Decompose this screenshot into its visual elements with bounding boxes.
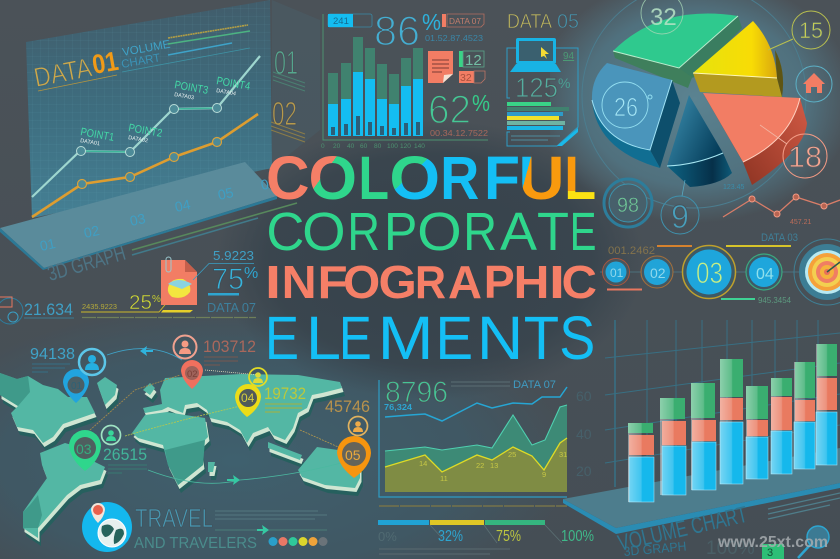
value tag 241 (328, 14, 372, 27)
bar 4 (720, 359, 743, 484)
title line: elements: E (436, 304, 473, 372)
figure: 001.2462 (608, 245, 655, 257)
heading: 05 (557, 11, 579, 33)
chart back wall (26, 0, 272, 218)
bar 1 (628, 423, 654, 502)
figure and percent 25: % (152, 294, 161, 305)
figure 8796: 8796 (385, 376, 448, 409)
percent 62: % (472, 90, 490, 116)
title line: colorful (266, 144, 596, 212)
data tag (442, 14, 484, 27)
figure and percent 25: 2435.9223 (82, 302, 117, 311)
person marker 26515: 26515 (103, 445, 147, 464)
watermark: www.25xt.com (717, 534, 828, 551)
data labels: 11 (440, 474, 448, 483)
point labels: DATA02 (128, 135, 148, 144)
bar 2 (660, 398, 686, 495)
title line: infographic: O (343, 256, 380, 308)
title line: infographic: A (448, 256, 482, 308)
fine print (379, 549, 510, 554)
axes (323, 14, 488, 140)
heading and travelers: AND TRAVELERS (134, 535, 257, 552)
person marker 94138 (30, 346, 105, 375)
slice: yellow (693, 21, 783, 97)
icon: home (796, 66, 832, 102)
title line: infographic: H (514, 256, 550, 308)
caption 3D graph: 3D GRAPH (623, 539, 687, 559)
heading data 07: DATA 07 (513, 379, 556, 391)
data labels: 31 (559, 450, 567, 459)
callout 15 (768, 11, 830, 50)
data labels (419, 450, 567, 483)
title line: corporate: O (417, 202, 462, 262)
step 04 (746, 254, 782, 290)
value tag 32: 32 (460, 72, 472, 84)
figure 100%: 100% (706, 538, 755, 559)
axis numbers: 04 (173, 196, 192, 215)
point labels: DATA03 (174, 92, 194, 101)
data labels: 14 (419, 459, 427, 468)
slice: green (613, 14, 742, 88)
title line: infographic: I (265, 256, 281, 308)
axis numbers: 0 (259, 176, 270, 193)
percent 86: % (422, 9, 441, 35)
data labels: 25 (508, 450, 516, 459)
green area (385, 405, 567, 492)
value tag 32 (459, 71, 485, 84)
callout 18 (760, 125, 827, 178)
slice: navy wedge (667, 95, 732, 187)
data labels: 22 (476, 461, 484, 470)
axis values: 60 (576, 388, 592, 404)
percent labels: 100% (561, 528, 594, 545)
icon: target (794, 239, 840, 305)
percent 75: 75 (212, 263, 244, 296)
figure 5.9223 (193, 249, 254, 280)
step 01: 01 (610, 266, 624, 280)
value tag 241: 241 (333, 16, 349, 27)
axis numbers: 01 (38, 235, 57, 254)
title line: colorful: L (358, 144, 389, 212)
chart heading: VOLUME (121, 39, 172, 59)
percent 75 (208, 263, 258, 296)
map continents top (0, 373, 360, 538)
axis values: 40 (576, 426, 592, 442)
person marker 26515 (102, 426, 147, 473)
title line: infographic: G (378, 256, 417, 308)
fine print (215, 511, 327, 519)
title line: corporate: C (266, 202, 304, 262)
fine print (451, 382, 510, 386)
figure 5.9223: 5.9223 (213, 249, 254, 263)
person marker 103712 (174, 336, 256, 365)
icon: green tag (762, 544, 784, 559)
title line: infographic: I (549, 256, 565, 308)
title line: colorful: O (308, 144, 357, 212)
title line: elements: M (378, 304, 434, 372)
percent 62: 62 (428, 88, 471, 132)
panel: circle stats and steps (600, 179, 840, 305)
value tag 12: 12 (465, 52, 482, 69)
bar 5 (746, 386, 768, 479)
person marker 19732 (249, 368, 306, 412)
title line: corporate: R (463, 202, 497, 262)
gauge 98 (604, 179, 652, 227)
panel: area chart (378, 376, 594, 554)
figure and percent 25 (81, 292, 193, 314)
title line: infographic: C (562, 256, 597, 308)
side number 01 (273, 44, 305, 91)
data labels: 13 (490, 461, 498, 470)
percent labels: 0% (378, 529, 397, 544)
callout 26 (602, 82, 652, 128)
pin 02 (181, 360, 203, 389)
grid (605, 320, 840, 487)
heading travel: TRAVEL (135, 503, 213, 533)
icon: clock chart (0, 297, 23, 324)
axis numbers (38, 176, 270, 254)
slice: blue (592, 63, 680, 168)
person marker 19732: 19732 (264, 384, 306, 403)
figure: 945.3454 (758, 296, 792, 305)
slice: coral (703, 93, 807, 185)
orange data line (32, 114, 258, 217)
point labels: POINT4 (215, 75, 251, 93)
title line: elements: T (524, 304, 559, 372)
horizontal bars (507, 102, 569, 130)
title line: infographic: F (318, 256, 348, 308)
gauge 98: 98 (617, 194, 639, 217)
bar 3 (691, 383, 716, 490)
heading data 03: DATA 03 (761, 232, 798, 244)
side number 02: 02 (272, 95, 297, 132)
data tag: DATA 07 (449, 16, 481, 26)
title line: corporate: A (500, 202, 537, 262)
chart floor (563, 448, 840, 534)
title line: corporate (266, 202, 596, 262)
point labels: POINT2 (127, 122, 163, 140)
pin 04 (235, 384, 261, 417)
title line: colorful: F (484, 144, 520, 212)
panel: 3D pie chart (582, 0, 832, 208)
panel: 3D bar chart (563, 320, 840, 559)
step 03 (682, 246, 736, 298)
pin 05 (337, 436, 371, 478)
chart heading: DATA (31, 52, 94, 93)
point labels: DATA01 (80, 138, 100, 147)
pin 02: 02 (187, 369, 198, 380)
stacked bars (328, 37, 423, 136)
axis labels: 80 (374, 143, 382, 150)
map darker regions (0, 373, 205, 528)
icon: magnifier (798, 526, 829, 558)
title line: elements: L (306, 304, 341, 372)
figure 21.634: 21.634 (24, 300, 73, 319)
icon: document (428, 51, 453, 83)
bar 8 (816, 344, 837, 465)
pin 05: 05 (345, 447, 361, 463)
panel: document stats (0, 249, 258, 324)
map continents pale edge (2, 377, 362, 542)
heading (507, 11, 579, 33)
axis labels (321, 143, 425, 150)
axis numbers: 03 (128, 210, 147, 229)
progress bar (378, 520, 562, 543)
frame (507, 48, 578, 146)
title line: elements (265, 304, 595, 372)
title line: infographic: N (282, 256, 317, 308)
pin 03 (69, 430, 101, 471)
panel: top bar chart (321, 7, 490, 150)
title line: corporate: O (302, 202, 346, 262)
fine print lines (511, 136, 560, 140)
title line: colorful: O (389, 144, 440, 212)
pin 04: 04 (241, 391, 255, 405)
title line: corporate: P (384, 202, 417, 262)
axis labels: 40 (347, 143, 355, 150)
gauge 9 (661, 180, 699, 235)
olive area (385, 438, 567, 492)
bar 7 (794, 362, 815, 469)
percent 86 (374, 7, 441, 54)
panel: travel heading (82, 502, 328, 552)
3D graph caption (45, 203, 297, 286)
panel: data 05 laptop (507, 11, 579, 146)
coral line chart: 457.21 (790, 219, 812, 226)
axis numbers: 05 (216, 184, 235, 203)
axis labels: 140 (414, 143, 425, 150)
title line: elements: E (265, 304, 299, 372)
percent 125: 125 (515, 72, 558, 103)
route lines (90, 349, 352, 483)
pin 01: 01 (71, 381, 83, 392)
chart floor (0, 162, 277, 270)
chart axes (379, 380, 567, 497)
point labels: DATA04 (216, 88, 236, 97)
title line: corporate: T (537, 202, 569, 262)
green line (385, 405, 567, 451)
bar 6 (771, 378, 792, 474)
title line: colorful: U (518, 144, 564, 212)
title line: elements: E (339, 304, 372, 372)
value tag 12 (459, 51, 484, 69)
panel: 3D line graph (0, 0, 320, 286)
icon: globe badge (82, 502, 132, 552)
callout 26: 26 (614, 92, 638, 122)
axis values (576, 388, 592, 479)
pin 03: 03 (76, 441, 92, 457)
panel: world map (0, 336, 371, 546)
figure 76,324: 76,324 (384, 403, 413, 412)
percent labels: 32% (438, 528, 463, 545)
icon: airplane upper (140, 346, 153, 356)
3D graph caption: 3D GRAPH (45, 242, 128, 286)
point labels: POINT1 (79, 126, 115, 144)
side number 01: 01 (274, 44, 298, 81)
caption line (379, 505, 567, 507)
person marker 103712: 103712 (203, 337, 256, 356)
axis values: 20 (576, 463, 592, 479)
title line: colorful: L (564, 144, 596, 212)
percent 75: % (244, 265, 258, 282)
point labels: POINT3 (173, 79, 209, 97)
point labels (79, 75, 251, 147)
title line: colorful: C (266, 144, 310, 212)
title line: colorful: R (440, 144, 479, 212)
person marker 45746: 45746 (325, 397, 370, 416)
coral line chart (723, 184, 840, 226)
person marker 94138: 94138 (30, 346, 75, 363)
axis labels: 100 (387, 143, 398, 150)
title line: infographic: R (415, 256, 446, 308)
teal data line (32, 56, 260, 197)
person marker 45746 (325, 397, 370, 436)
title block (265, 144, 597, 372)
blue line (385, 387, 567, 421)
title line: infographic: P (484, 256, 515, 308)
figure: 00.34.12.7522 (430, 128, 488, 138)
figure and percent 25: 25 (129, 292, 152, 314)
callout 15: 15 (799, 18, 823, 43)
coloured location dots (268, 537, 328, 546)
coral line chart: 123.45 (723, 184, 745, 191)
chart heading (31, 25, 250, 93)
icon: green tag: 3 (767, 547, 773, 559)
title line: elements: N (477, 304, 523, 372)
fine print (768, 493, 840, 519)
step 02 (641, 256, 673, 288)
step 03: 03 (696, 257, 723, 290)
icon: airplane lower (227, 475, 240, 485)
icon: laptop (510, 38, 561, 72)
icon: document with pie (161, 257, 197, 305)
step 02: 02 (650, 265, 666, 281)
percent labels: 75% (496, 528, 521, 545)
axis labels: 60 (360, 143, 368, 150)
axis labels: 120 (400, 143, 411, 150)
callout 18: 18 (788, 141, 822, 174)
connecting line (600, 271, 800, 273)
fine print (82, 316, 256, 318)
ring (582, 0, 806, 208)
title line: corporate: R (347, 202, 380, 262)
title line: infographic (265, 256, 597, 308)
divider with airplane (215, 525, 327, 535)
callout 32 (641, 0, 683, 34)
title line: elements: S (559, 304, 595, 372)
label data 07: DATA 07 (207, 300, 256, 315)
percent 125: % (558, 75, 570, 91)
axis numbers: 02 (82, 222, 101, 241)
value 94: 94 (563, 51, 575, 62)
chart heading: 01 (90, 46, 121, 80)
figure: 01.52.87.4523 (425, 33, 483, 43)
title line: corporate: E (570, 202, 596, 262)
heading: DATA (507, 11, 553, 33)
step 04: 04 (756, 266, 774, 283)
pin 01 (63, 369, 89, 403)
step 01 (602, 258, 630, 286)
corner accent (557, 128, 578, 146)
axis labels: 20 (333, 143, 341, 150)
percent labels (378, 528, 594, 545)
chart heading: CHART (120, 52, 161, 71)
accent bars (607, 246, 791, 299)
data labels: 9 (542, 470, 546, 479)
callout 32: 32 (650, 4, 677, 31)
chart side wall (272, 0, 320, 168)
percent 86: 86 (374, 7, 420, 54)
gauge 9: 9 (671, 198, 689, 235)
caption volume chart: VOLUME CHART (615, 501, 750, 556)
axis labels: 0 (321, 143, 325, 150)
map continents dark relief (3, 381, 363, 546)
yellow line (385, 438, 567, 472)
